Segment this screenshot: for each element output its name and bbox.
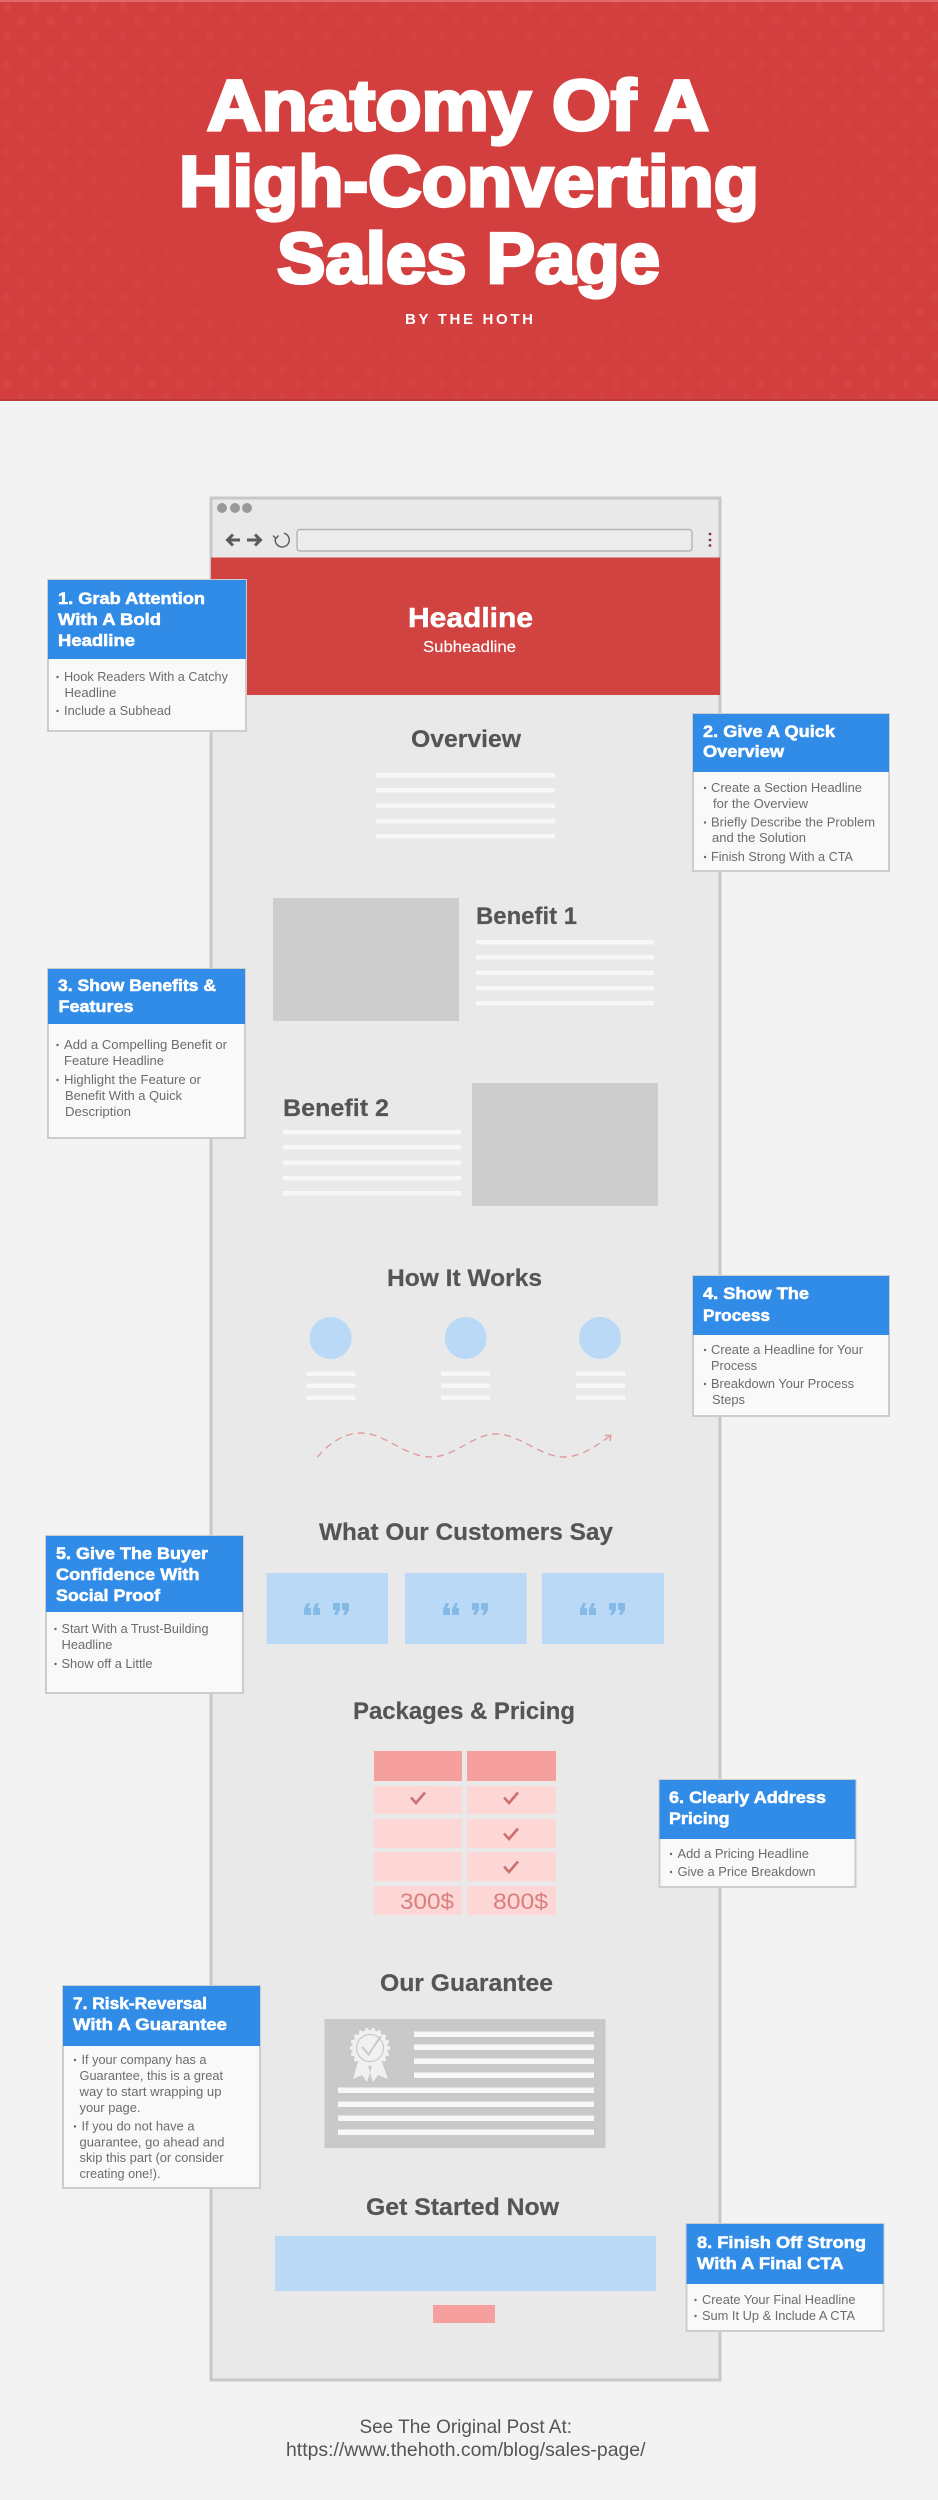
benefit 2: Benefit 2 [283,1095,389,1122]
callout 1 header: Headline [58,631,135,650]
callout 6 header [660,1780,856,1839]
icon: browser menu [709,533,711,547]
callout 3 bullets: Highlight the Feature or [64,1073,201,1087]
icon: back arrow [228,534,240,546]
footer source text: https://www.thehoth.com/blog/sales-page/ [286,2439,646,2461]
callout 8 bullets: Create Your Final Headline [702,2293,856,2307]
callout 1 bullets [56,670,229,718]
callout 7 bullets: If your company has a [82,2053,207,2067]
benefit 2 [283,1083,658,1206]
step 3 [576,1317,625,1400]
callout 2 header: Overview [703,742,785,761]
callout 4 header: 4. Show The [703,1284,809,1303]
icon: check marks [411,1792,518,1872]
pricing table [374,1751,556,1915]
callout 2 bullets [704,781,875,864]
callout 1 header: With A Bold [58,610,161,629]
how it works section: How It Works [387,1265,542,1292]
title: Anatomy Of A [207,67,709,146]
callout 3 header: 3. Show Benefits & [58,976,216,995]
callout 5 bullets: Start With a Trust-Building [62,1622,209,1636]
callout 7 bullets: way to start wrapping up [78,2085,222,2099]
footer source text: See The Original Post At: [360,2416,572,2438]
hero section [211,558,720,695]
callout 2 header [693,714,889,772]
callout 6 [660,1780,856,1887]
callout 2 bullets: Finish Strong With a CTA [711,850,854,864]
callout 4 header [693,1276,889,1335]
callout 6 bullets: Add a Pricing Headline [678,1847,809,1861]
callout 7 bullets: creating one!). [80,2167,160,2181]
title [179,67,759,299]
callout 1 header: 1. Grab Attention [58,589,205,608]
pricing section [353,1698,575,1915]
callout 5 bullets: Show off a Little [62,1657,153,1671]
callout 6 header: Pricing [669,1809,730,1828]
callout 6 header: 6. Clearly Address [669,1788,826,1807]
callout 7 [63,1986,260,2188]
callout 6 bullets [670,1847,816,1879]
callout 5 header [46,1536,243,1612]
callout 5 header: 5. Give The Buyer [56,1544,208,1563]
callout 5 bullets: Headline [62,1638,113,1652]
callout 8 header [686,2224,884,2284]
callout 3 bullets: Description [65,1105,131,1119]
callout 2 header: 2. Give A Quick [703,722,836,741]
callout 1 [48,580,246,731]
callout 2 bullets: and the Solution [712,831,806,845]
callout 7 header: With A Guarantee [73,2015,227,2034]
callout 4 header: Process [703,1306,770,1325]
callout 3 header [48,969,245,1024]
callout 7 header: 7. Risk-Reversal [73,1994,207,2013]
browser window [211,498,720,2380]
testimonials section [266,1519,664,1644]
pricing section: Packages & Pricing [353,1698,575,1725]
callout 1 header [48,580,246,659]
benefit 1: Benefit 1 [476,903,577,930]
callout 3 bullets [56,1038,227,1119]
callout 3 header: Features [58,997,134,1016]
callout 1 bullets: Headline [64,686,117,700]
final cta section: Get Started Now [366,2194,559,2221]
callout 2 [693,714,889,871]
callout 2 bullets: Briefly Describe the Problem [711,816,875,830]
callout 8 [686,2224,884,2331]
testimonials section: What Our Customers Say [319,1519,614,1546]
icon: guarantee badge [352,2030,388,2082]
callout 3 bullets: Add a Compelling Benefit or [64,1038,227,1052]
callout 8 bullets [694,2293,856,2323]
callout 7 bullets: guarantee, go ahead and [80,2136,225,2150]
callout 5 header: Confidence With [56,1565,200,1584]
callout 2 bullets: for the Overview [713,797,809,811]
step 2 [441,1317,490,1400]
callout 1 bullets: Include a Subhead [64,704,171,718]
icon: forward arrow [247,534,260,546]
prices: 800$ [493,1889,549,1914]
address bar [297,530,692,551]
testimonial card 1 [266,1573,388,1644]
callout 7 bullets: If you do not have a [82,2120,195,2134]
callout 5 header: Social Proof [56,1586,160,1605]
callout 7 header [63,1986,260,2046]
callout 4 bullets: Create a Headline for Your [711,1343,863,1357]
callout 7 bullets: your page. [80,2101,140,2115]
guarantee card [324,2019,606,2148]
testimonial card 2 [405,1573,526,1644]
guarantee section [324,1970,606,2148]
callout 4 [693,1276,889,1416]
callout 5 bullets [54,1622,209,1671]
guarantee section: Our Guarantee [380,1970,553,1997]
callout 3 [48,969,245,1138]
callout 4 bullets: Process [711,1359,757,1373]
callout 6 bullets: Give a Price Breakdown [678,1865,816,1879]
how it works section [306,1265,625,1457]
header banner [0,0,938,401]
callout 3 bullets: Benefit With a Quick [65,1089,183,1103]
title: Sales Page [277,220,660,299]
callout 8 bullets: Sum It Up & Include A CTA [702,2309,856,2323]
byline: BY THE HOTH [405,311,533,328]
callout 4 bullets: Steps [712,1393,745,1407]
hero section: Headline [408,602,533,633]
final cta section [275,2194,656,2323]
callout 3 bullets: Feature Headline [64,1054,164,1068]
callout 8 header: 8. Finish Off Strong [697,2233,866,2252]
overview section [376,726,555,838]
callout 2 bullets: Create a Section Headline [711,781,862,795]
benefit 1 [273,898,654,1021]
callout 7 bullets: Guarantee, this is a great [80,2069,224,2083]
callout 7 bullets [74,2053,225,2181]
callout 1 bullets: Hook Readers With a Catchy [64,670,229,684]
prices [400,1889,549,1914]
title: High-Converting [179,143,759,222]
icon: refresh [273,533,289,547]
window control dots [217,503,252,513]
callout 5 [46,1536,243,1693]
callout 4 bullets: Breakdown Your Process [711,1377,854,1391]
overview section: Overview [411,726,521,753]
footer source text [286,2416,646,2461]
callout 7 bullets: skip this part (or consider [80,2151,224,2165]
cta button [433,2305,495,2323]
prices: 300$ [400,1889,455,1914]
callout 4 bullets [704,1343,863,1407]
step 1 [306,1317,356,1400]
hero section: Subheadline [423,639,516,656]
callout 8 header: With A Final CTA [697,2254,844,2273]
arrow: dashed wave [318,1433,611,1457]
testimonial card 3 [542,1573,664,1644]
